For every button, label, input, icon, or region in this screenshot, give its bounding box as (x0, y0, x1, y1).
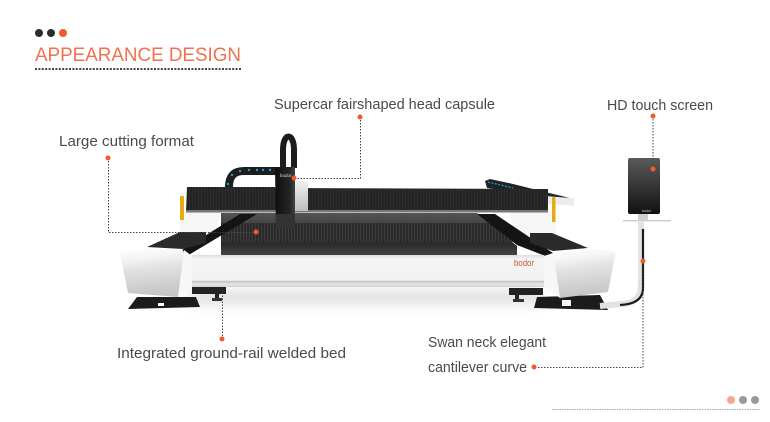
rear table (186, 187, 548, 212)
gantry right block (295, 181, 308, 211)
stand black strip (620, 229, 643, 305)
left feet (128, 297, 200, 309)
right bracket (543, 197, 574, 206)
vertical drag chain (283, 136, 294, 168)
label: welded bed: Integrated ground-rail welded bed (117, 346, 346, 362)
control stand (600, 222, 641, 306)
right dark rail (530, 233, 588, 251)
screen neck (638, 213, 648, 220)
footer dots (727, 396, 759, 404)
floor shadow (190, 290, 540, 304)
title underline (35, 68, 242, 70)
rear table edge (186, 210, 548, 212)
front rail (192, 255, 544, 287)
marker dots (106, 114, 656, 370)
rear drag chain (485, 179, 570, 198)
right levelling block (509, 288, 543, 295)
label: cantilever curve: cantilever curve (428, 360, 527, 376)
head lower (276, 214, 295, 228)
header dots (35, 29, 67, 37)
label: swan neck: Swan neck elegant (428, 335, 546, 351)
right feet (534, 295, 608, 310)
upper drag chain (229, 171, 277, 187)
right white post (510, 210, 556, 246)
left dark rail (147, 232, 206, 249)
laser cutting machine (120, 136, 671, 310)
label: head capsule: Supercar fairshaped head capsule (274, 97, 495, 113)
cutting bed (221, 213, 517, 255)
title: APPEARANCE DESIGN (35, 44, 241, 66)
right foot notch (562, 300, 571, 306)
left levelling block (192, 287, 226, 294)
label: cutting format: Large cutting format (59, 134, 194, 150)
right end box (553, 248, 615, 298)
head capsule (275, 167, 295, 228)
left diagonal beam (182, 214, 257, 256)
touch screen (628, 158, 660, 214)
label: touch screen: HD touch screen (607, 98, 713, 114)
yellow markers (180, 196, 184, 220)
left end box (120, 248, 184, 297)
screen logo: bodor (642, 209, 652, 213)
left white post (180, 212, 222, 240)
head logo: bodor (280, 173, 292, 178)
left foot notch (158, 303, 164, 306)
rear chain lights (488, 182, 513, 188)
bodor logo: bodor (514, 258, 534, 268)
leader lines (108, 116, 653, 368)
screen shelf (623, 220, 671, 222)
chain blue lights (227, 169, 271, 185)
footer line (552, 408, 760, 410)
bed slats (221, 223, 513, 242)
right diagonal beam (477, 214, 553, 259)
